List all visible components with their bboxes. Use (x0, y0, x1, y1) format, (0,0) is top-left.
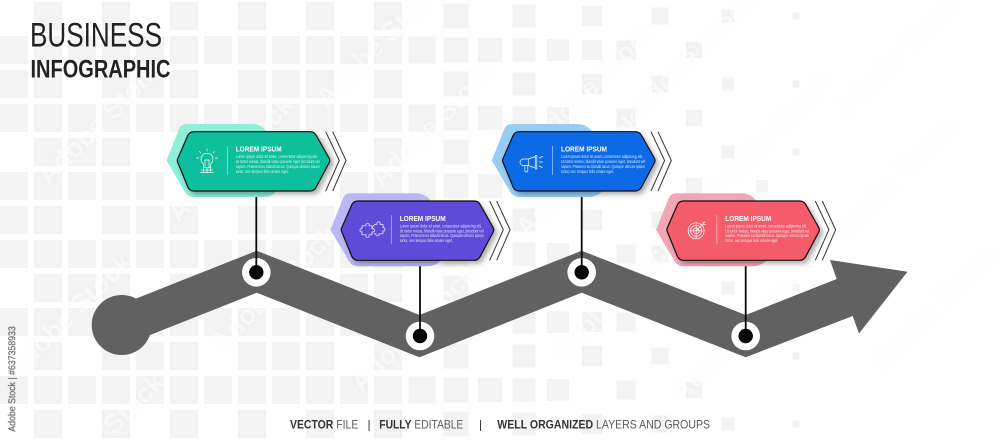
arrow: zigzag timeline (92, 251, 907, 357)
heading: infographic: INFOGRAPHIC (30, 56, 171, 83)
icon: megaphone (520, 156, 543, 172)
chevrons (815, 201, 836, 260)
text block: sapien. Praesent eu blandit lacus. Quisque ultrices ipsum (400, 233, 484, 238)
connector 3 (567, 197, 596, 287)
background: stock watermarks: Adobe Stock (700, 64, 838, 203)
background: stock watermarks: Adobe Stock (665, 269, 803, 408)
card backing shape (492, 124, 603, 197)
background: stock watermarks: Adobe Stock (32, 52, 170, 191)
text block: Lorem ipsum dolor sit amet, consectetur adipiscing elit. (236, 154, 318, 159)
divider (552, 146, 554, 175)
background: stock watermarks: Adobe Stock (345, 259, 483, 398)
card body (341, 201, 494, 260)
title (30, 17, 171, 83)
marker 1 (242, 258, 271, 287)
text block (725, 214, 810, 243)
icon: target (688, 222, 706, 239)
text block: Lorem ipsum dolor sit amet, consectetur adipiscing elit. (725, 224, 807, 228)
text block: LOREM IPSUM (725, 214, 771, 223)
chevrons (651, 132, 671, 191)
background: stock watermarks: Adobe Stock (545, 229, 683, 368)
text block: LOREM IPSUM (561, 145, 607, 154)
card backing shape (330, 193, 442, 266)
text block (236, 145, 320, 174)
text block (400, 214, 484, 243)
divider (716, 215, 718, 244)
heading: business: BUSINESS (30, 17, 162, 55)
connector 4 (731, 266, 760, 350)
panel: step 3 blue card (492, 124, 671, 197)
divider (390, 215, 392, 244)
marker 4 (731, 322, 760, 350)
background: stock watermarks: Stock (97, 366, 171, 440)
background: stock watermarks: Adobe Stock (525, 14, 663, 153)
background: stock watermarks: Adobe Stock (0, 246, 138, 385)
text block: sapien. Praesent eu blandit lacus. Quisque ultrices ipsum (561, 164, 645, 169)
text block: LOREM IPSUM (400, 214, 446, 223)
connector 1 (242, 197, 271, 287)
card backing shape (166, 124, 278, 197)
icon: puzzle pieces (360, 222, 385, 237)
footer caption: | (368, 418, 371, 432)
panel: step 2 purple card (330, 193, 510, 266)
marker 3 (567, 258, 596, 287)
chevrons (490, 201, 510, 260)
background: stock watermarks: Adobe Stock (865, 239, 1000, 378)
panel: step 1 teal card (166, 124, 346, 197)
card body (667, 201, 819, 260)
footer caption: | (479, 418, 482, 432)
text block: tortor, nec tempus felis ornare eget. (400, 238, 453, 243)
chevrons (326, 132, 346, 191)
connector 2 (406, 266, 434, 350)
text block: tortor, nec tempus felis ornare eget. (725, 238, 778, 243)
text block: Ut tortor metus, blandit vitae posuere eget, tincidunt vel (561, 159, 645, 164)
background: stock watermarks: Adobe Stock (510, 104, 648, 243)
text block: Lorem ipsum dolor sit amet, consectetur adipiscing elit. (561, 154, 643, 159)
icon: light bulb (196, 149, 218, 172)
stock id vertical text: Adobe Stock | #637358933 (6, 326, 18, 432)
footer caption: WELL ORGANIZED LAYERS AND GROUPS (497, 418, 710, 432)
text block: Ut tortor metus, blandit vitae posuere eget, tincidunt vel (725, 228, 809, 233)
divider (226, 146, 228, 175)
card body (503, 132, 655, 191)
marker 2 (406, 322, 434, 350)
text block: LOREM IPSUM (236, 145, 282, 154)
text block (561, 145, 645, 174)
background: stock watermarks: Adobe Stock (825, 109, 963, 248)
footer caption: VECTOR FILE (290, 418, 358, 432)
text block: tortor, nec tempus felis ornare eget. (561, 169, 614, 174)
card body (177, 132, 330, 191)
text block: sapien. Praesent eu blandit lacus. Quisque ultrices ipsum (725, 233, 810, 238)
footer caption: FULLY EDITABLE (379, 418, 463, 432)
background: stock watermarks: Adobe Stock (205, 219, 343, 358)
footer caption (290, 418, 710, 432)
text block: Ut tortor metus, blandit vitae posuere eget, tincidunt vel (400, 228, 484, 233)
background: stock watermarks: Adobe Stock (162, 89, 300, 228)
text block: Ut tortor metus, blandit vitae posuere eget, tincidunt vel (236, 159, 320, 164)
text block: sapien. Praesent eu blandit lacus. Quisque ultrices ipsum (236, 164, 320, 169)
text block: tortor, nec tempus felis ornare eget. (236, 169, 289, 174)
background: stock watermarks: Adobe Stock (365, 54, 503, 193)
panel: step 4 red card (656, 193, 836, 266)
arrow start circle (92, 295, 152, 355)
card backing shape (656, 193, 768, 266)
text block: Lorem ipsum dolor sit amet, consectetur adipiscing elit. (400, 224, 482, 228)
background: grid of grey squares (0, 2, 800, 438)
